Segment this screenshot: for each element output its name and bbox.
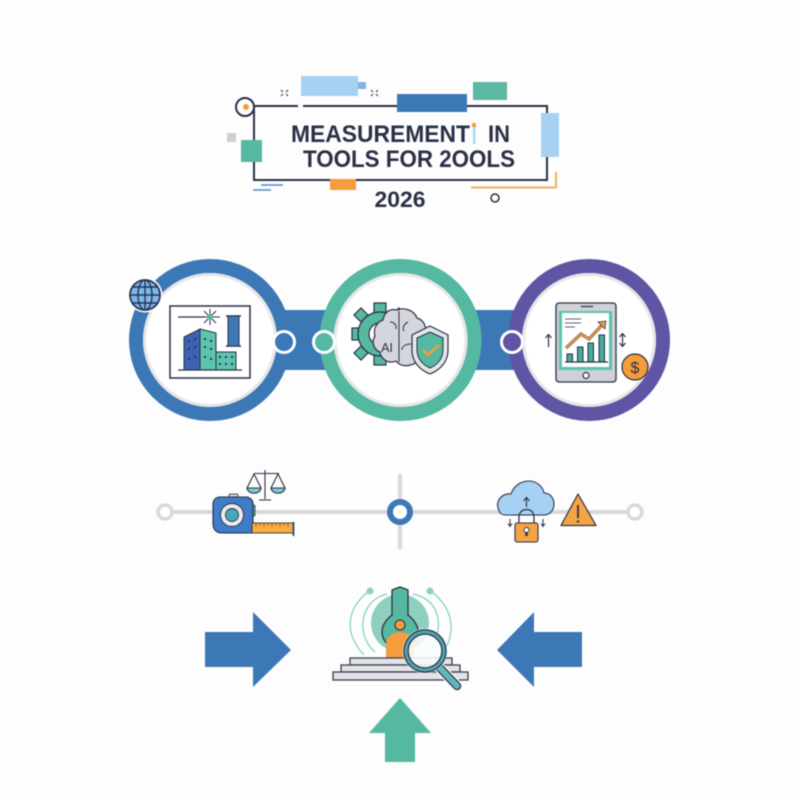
icon: AI gear brain and shield (352, 303, 448, 374)
connector band (270, 310, 520, 370)
icon: balance scales (247, 470, 285, 500)
timeline panel (158, 470, 642, 549)
icon: building site (170, 306, 250, 378)
icon: globe (128, 278, 162, 312)
magnifying glass (402, 628, 457, 686)
title frame (254, 106, 547, 180)
decorative grey square (227, 133, 236, 142)
arrow: right pointing left (497, 612, 582, 687)
gear (352, 303, 406, 365)
decorative dark blue bar (397, 94, 467, 112)
double arrow (620, 334, 626, 346)
title line 2: TOOLS FOR 2OOLS (303, 146, 515, 173)
purple ring (515, 266, 663, 414)
decorative green block (473, 82, 507, 100)
icon: cloud with padlock (498, 481, 554, 542)
arrow: bottom pointing up (369, 698, 431, 762)
header panel (227, 76, 559, 212)
bottom convergence panel (205, 587, 582, 762)
signal arcs and halo (350, 588, 451, 655)
icon: central figure with magnifier (333, 587, 468, 686)
up arrow (546, 334, 552, 347)
title word IN: IN (488, 121, 510, 148)
purple connector node (502, 332, 522, 352)
small ring (491, 194, 499, 202)
person (386, 620, 414, 658)
stepped platform (333, 658, 468, 680)
icon: warning triangle (561, 494, 596, 526)
right end node (628, 505, 642, 519)
AI label: AI (381, 341, 393, 355)
arrow: left pointing right (205, 612, 291, 687)
dollar coin: $ (631, 360, 640, 377)
icon: tape measure (213, 494, 294, 536)
brain (373, 309, 426, 366)
decorative green square (241, 140, 262, 162)
left end node (158, 505, 172, 519)
timeline axis (172, 474, 628, 549)
bottle shaped tower (382, 587, 418, 648)
connected circles panel (128, 266, 663, 414)
frame corner circle (236, 98, 254, 116)
decorative light blue side block (541, 113, 559, 157)
green ring (326, 266, 474, 414)
blue ring (136, 266, 284, 414)
title cursor mark (472, 123, 476, 144)
decorative orange block (330, 179, 356, 190)
orange corner line (471, 172, 556, 188)
decorative light blue tab (301, 76, 366, 96)
icon: tablet with growth chart (546, 303, 648, 382)
decorative blue lines (253, 185, 283, 190)
year: 2026 (374, 187, 426, 212)
shield (412, 326, 448, 374)
green connector node (314, 332, 334, 352)
sparkle marks (281, 90, 378, 96)
title line 1: MEASUREMENT (291, 121, 470, 148)
centre node (390, 502, 410, 522)
blue connector node (274, 332, 294, 352)
